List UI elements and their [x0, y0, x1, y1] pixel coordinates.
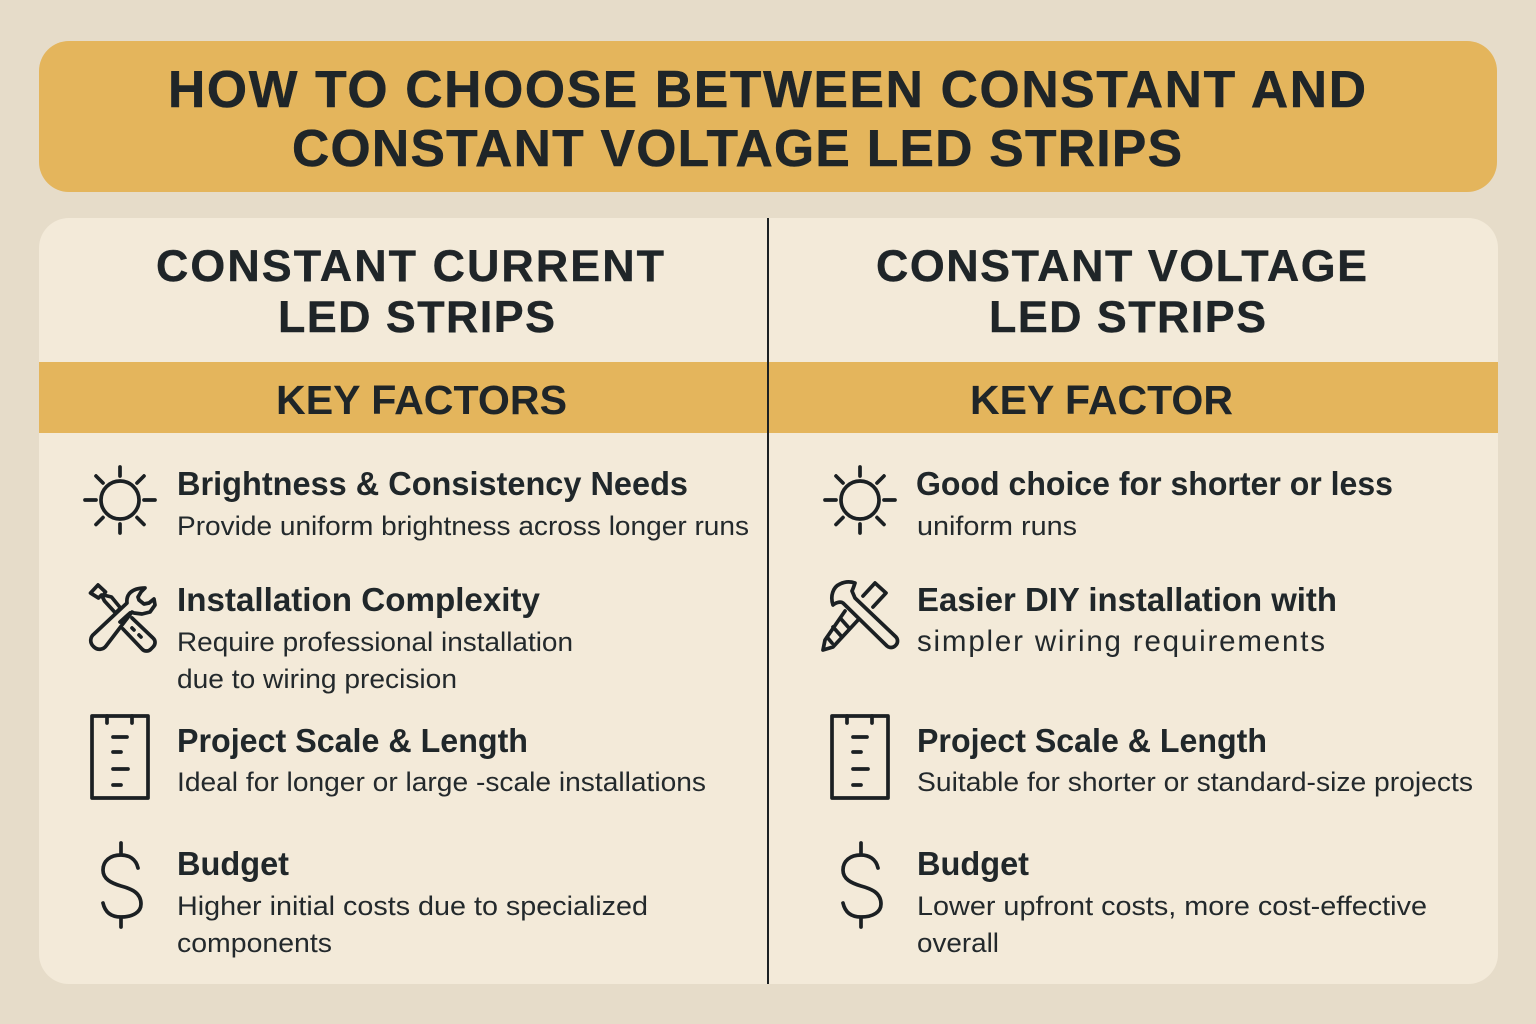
icon: hammer and chisel [823, 582, 898, 650]
column divider [767, 218, 769, 984]
right column heading [876, 241, 1367, 342]
text: DIY right: simpler wiring requirements [917, 625, 1325, 658]
text: DIY right [917, 581, 1337, 658]
text: project scale right: Project Scale & Length [917, 722, 1267, 759]
text: budget right [917, 845, 1427, 958]
text: project scale right: Suitable for shorter or standard-size projects [917, 767, 1473, 797]
text: budget left: Budget [177, 845, 289, 882]
text: budget right: overall [917, 928, 999, 958]
left column heading: CONSTANT CURRENT [156, 241, 664, 291]
icon: sun (left) [85, 467, 155, 533]
text: project scale left: Project Scale & Length [177, 722, 528, 759]
text: shorter runs right: uniform runs [917, 511, 1077, 541]
key factors band: left [39, 362, 768, 433]
title banner: HOW TO CHOOSE BETWEEN CONSTANT AND [168, 60, 1366, 118]
key factor band: right [769, 362, 1498, 433]
title banner: CONSTANT VOLTAGE LED STRIPS [292, 119, 1182, 177]
icon: screwdriver and wrench [90, 585, 155, 651]
icon: ruled sheet (left) [92, 716, 148, 798]
text: installation left: Installation Complexity [177, 581, 541, 618]
icon: dollar (left) [103, 843, 141, 927]
icon: ruled sheet (right) [832, 716, 888, 798]
text: installation left: due to wiring precision [177, 664, 457, 694]
text: project scale right [917, 722, 1473, 797]
right column heading: LED STRIPS [989, 292, 1266, 342]
right band label: KEY FACTOR [970, 377, 1233, 423]
text: budget right: Budget [917, 845, 1029, 882]
right column heading: CONSTANT VOLTAGE [876, 241, 1367, 291]
text: budget right: Lower upfront costs, more cost-effective [917, 891, 1427, 921]
icon: sun (right) [825, 467, 895, 533]
text: shorter runs right [916, 465, 1393, 541]
text: budget left: components [177, 928, 332, 958]
text: project scale left: Ideal for longer or large -scale installations [177, 767, 706, 797]
comparison panel [39, 218, 1498, 984]
icon: dollar (right) [843, 843, 881, 927]
text: installation left [177, 581, 573, 694]
text: shorter runs right: Good choice for shorter or less [916, 465, 1393, 502]
text: brightness left: Provide uniform brightness across longer runs [177, 511, 749, 541]
text: budget left: Higher initial costs due to specialized [177, 891, 648, 921]
left band label: KEY FACTORS [276, 377, 567, 423]
text: installation left: Require professional installation [177, 627, 573, 657]
title banner [39, 41, 1497, 192]
left column heading: LED STRIPS [278, 292, 555, 342]
text: DIY right: Easier DIY installation with [917, 581, 1337, 618]
text: budget left [177, 845, 648, 958]
text: brightness left: Brightness & Consistency Needs [177, 465, 688, 502]
text: project scale left [177, 722, 706, 797]
left column heading [156, 241, 664, 342]
text: brightness left [177, 465, 749, 541]
